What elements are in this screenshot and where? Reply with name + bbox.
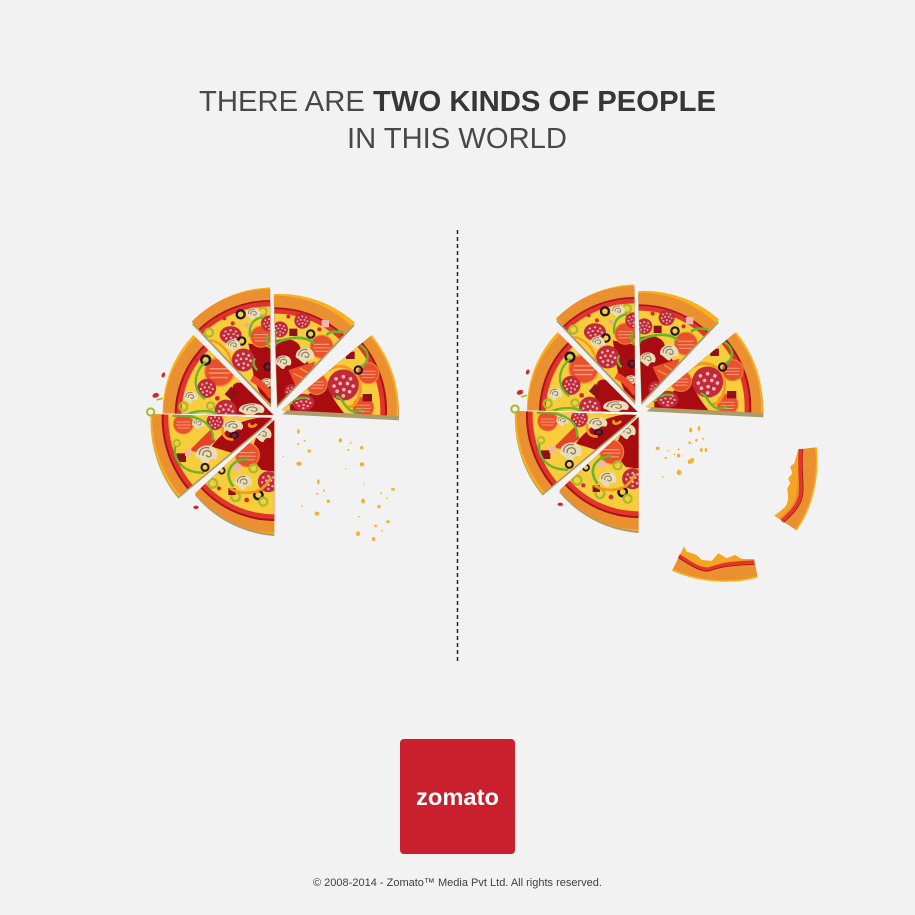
left pizza — [147, 284, 402, 543]
title — [199, 86, 716, 155]
crust piece: bottom — [672, 547, 758, 581]
copyright: © 2008-2014 - Zomato™ Media Pvt Ltd. All rights reserved. — [313, 877, 602, 889]
title: THERE ARE TWO KINDS OF PEOPLE — [199, 86, 716, 118]
zomato logo — [400, 739, 515, 854]
right pizza crumbs and crusts — [656, 426, 817, 581]
crumbs — [656, 426, 707, 478]
title: IN THIS WORLD — [347, 123, 567, 155]
zomato logo: zomato — [416, 784, 499, 810]
crust piece: right — [774, 447, 817, 530]
right pizza — [511, 281, 766, 540]
left pizza crumbs — [283, 429, 395, 541]
